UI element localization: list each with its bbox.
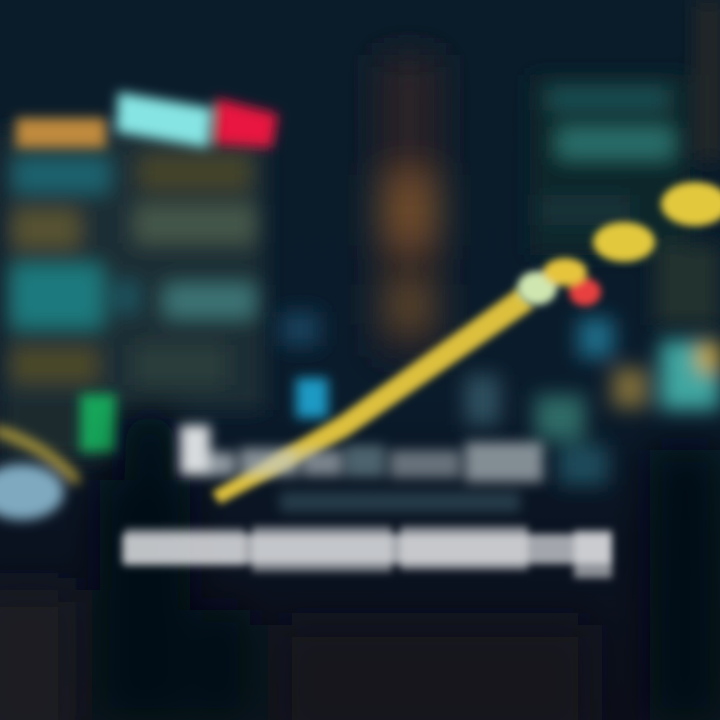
right building [530,0,720,325]
chart line rising [212,288,534,504]
right signs and lower right cluster [280,312,720,485]
blurred heading block [180,425,543,512]
top coloured signs [16,92,278,148]
centre tower [378,55,440,355]
left building [0,130,265,460]
blue and green accents [80,378,328,452]
chart end marker [517,182,720,306]
blurred subheading block [122,526,612,578]
lower left arc panel [0,430,78,520]
foreground silhouettes [0,414,720,720]
